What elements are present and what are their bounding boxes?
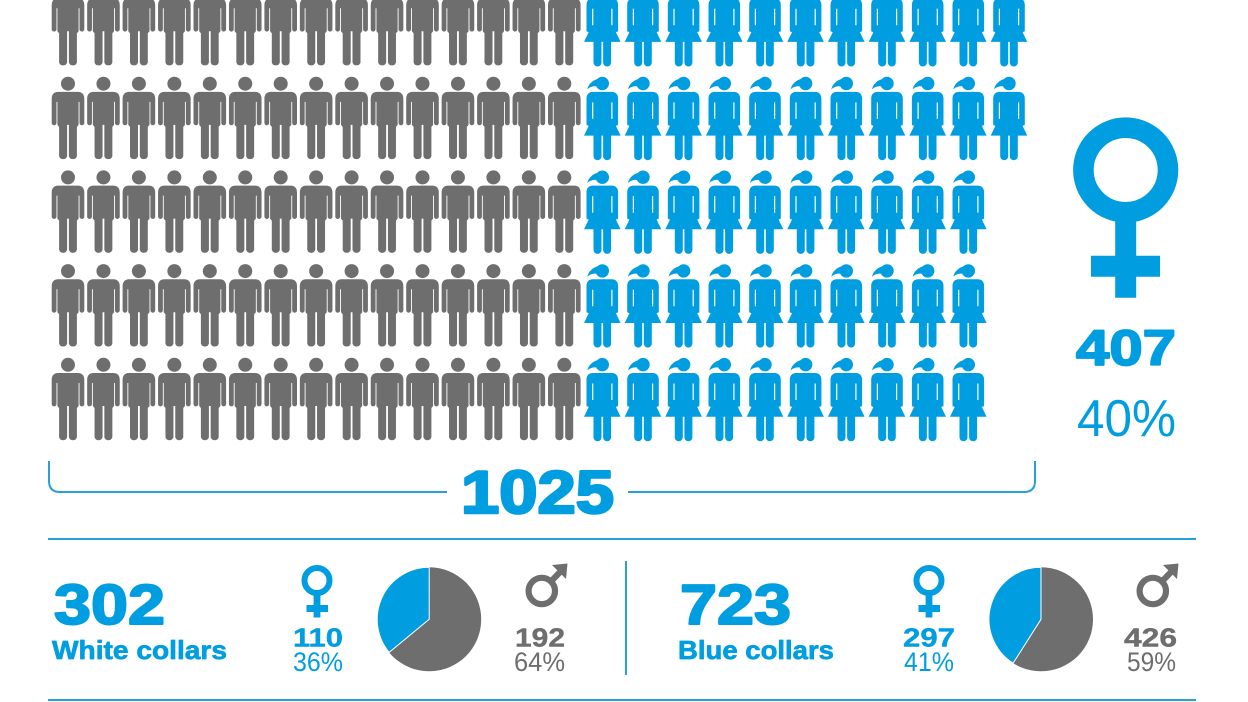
bracket under pictogram	[49, 461, 1035, 492]
female percentage: 36%	[293, 647, 343, 677]
pie chart: 36 / 64	[377, 567, 481, 671]
female count: 297	[903, 622, 955, 652]
panel: white collars	[52, 564, 568, 677]
female percentage: 41%	[904, 647, 954, 677]
top rule of breakdown band	[48, 538, 1196, 540]
women count: 407	[1076, 320, 1176, 376]
icon: male symbol	[529, 564, 568, 604]
white collars label: White collars	[52, 635, 227, 665]
male percentage: 64%	[514, 647, 565, 677]
pie chart: 41 / 59	[989, 567, 1093, 671]
icon: male symbol	[1140, 564, 1178, 604]
female count: 110	[293, 622, 343, 652]
pictogram: women, blue figures	[584, 0, 1027, 441]
bottom rule of breakdown band	[48, 699, 1196, 701]
panel: women total	[1076, 128, 1176, 448]
panel: blue collars	[678, 564, 1178, 677]
male count: 192	[515, 622, 565, 652]
total employees number: 1025	[461, 459, 614, 526]
pictogram: men, grey figures	[52, 0, 581, 440]
male percentage: 59%	[1127, 647, 1176, 677]
women percentage: 40%	[1077, 390, 1176, 448]
white collars total: 302	[54, 573, 165, 637]
male count: 426	[1124, 622, 1177, 652]
blue collars total: 723	[680, 573, 791, 637]
vertical divider between panels	[625, 561, 627, 675]
icon: large female symbol	[1083, 128, 1168, 298]
icon: female symbol	[304, 568, 330, 618]
icon: female symbol	[916, 568, 942, 618]
blue collars label: Blue collars	[678, 635, 834, 665]
